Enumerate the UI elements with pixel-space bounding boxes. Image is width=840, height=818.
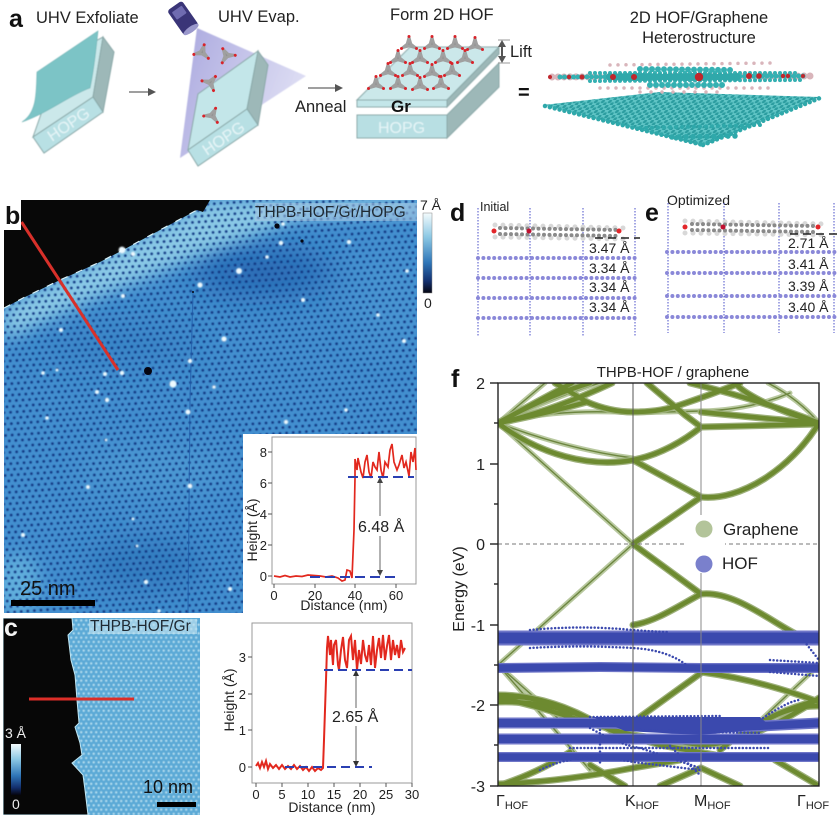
panel a: fabrication schematic [9,1,820,166]
label background [255,203,417,221]
label e: e [645,199,659,227]
graphene layers [478,258,638,318]
grid lines [668,203,834,333]
graphene bands [498,383,819,786]
legend: Graphene [723,520,799,539]
colour bar c: 0 [12,796,20,812]
HOF molecule side view [548,63,815,92]
molecules on surface [192,41,237,124]
bright adsorbates [21,222,409,613]
label a: a [9,5,24,33]
arrow: step 1 to 2 [129,88,156,96]
graphene layers [667,252,838,317]
step 3: layered block: HOPG [378,120,425,137]
legend: HOF [722,554,758,573]
step edge: black region [4,200,210,308]
x axis labels: HOF [636,800,659,812]
x axis labels [496,793,829,812]
distances: 3.40 Å [788,299,829,315]
inset: height profile b: Height (Å) [244,498,260,562]
chart c: height profile: 10 [301,787,315,802]
legend mask [685,515,725,573]
heading: UHV Evap.: UHV Evap. [218,8,300,26]
chart c: height profile: 30 [405,787,419,802]
step 1: exfoliated HOPG block: HOPG [45,105,93,145]
distances: 3.34 Å [589,260,630,276]
x axis labels: K [625,793,636,810]
label c: c [4,614,18,642]
caption: Initial: Initial [480,200,509,214]
chart c: height profile: Distance (nm) [288,799,376,815]
frame [498,383,819,786]
heading line 2: Heterostructure [642,29,756,47]
step 2: HOPG block [188,51,268,166]
distances: 3.47 Å [589,240,630,256]
step 1: exfoliated HOPG block [22,31,114,153]
label b: b [5,202,20,230]
ticks [268,452,396,588]
colour bar b [420,197,442,311]
y axis numbers: -3 [471,779,485,796]
label f: f [451,365,460,393]
distances: 3.39 Å [788,278,829,294]
distances: 3.34 Å [589,299,630,315]
label d: d [450,199,465,227]
arrow: lift [498,40,510,63]
y axis label: Energy (eV) [451,546,468,632]
K and M markers [633,383,701,786]
x axis labels: Γ [496,793,505,810]
panel c: STM image [3,618,200,815]
bands [498,383,819,786]
HOF bands [498,628,819,775]
legend [696,520,799,573]
chart c: height profile: Height (Å) [221,668,237,732]
step 2: evaporation cone [180,28,306,158]
inset: height profile b: 6.48 Å [358,517,405,536]
x axis labels: M [694,793,707,810]
inset: height profile b: 8 [260,445,267,460]
image title: THPB-HOF/Gr/HOPG [255,204,406,221]
dashed reference [595,237,640,239]
molecule [682,221,825,235]
distances: 2.71 Å [788,235,829,251]
heading: UHV Exfoliate: UHV Exfoliate [36,9,139,27]
heading: Form 2D HOF: Form 2D HOF [390,6,494,24]
fermi level [498,544,817,545]
profile line [29,698,134,700]
step edge: black region [3,618,88,815]
distances: 3.41 Å [788,256,829,272]
panel d: initial structure [450,199,640,337]
colour bar c: 3 Å [5,725,27,741]
y axis numbers: 0 [476,537,485,554]
label: Anneal: Anneal [295,98,346,116]
y axis numbers [471,376,485,796]
chart c: height profile: 2 [239,687,246,702]
graphene sheet [543,92,820,146]
caption: Optimized: Optimized [667,192,730,208]
inset: height profile b: 4 [260,507,267,522]
step 2: HOPG block: HOPG [200,119,248,159]
inset: height profile b: 60 [389,588,403,603]
inset: height profile b [243,434,417,613]
dashed reference [790,233,838,235]
colour bar c [5,725,27,812]
scale bar b [11,578,95,606]
distances [589,240,630,315]
distances: 3.34 Å [589,279,630,295]
grid lines [478,208,635,337]
profile line [22,222,118,370]
chart c: height profile: 0 [252,787,260,802]
scale bar c [143,777,196,807]
inset: height profile b: Distance (nm) [300,597,388,613]
scale bar b: 25 nm [20,578,76,600]
y axis numbers: -1 [471,618,485,635]
chart c: height profile: 1 [239,723,246,738]
HOF network [367,35,484,91]
inset: height profile b: 40 [348,588,362,603]
inset: height profile b: 0 [270,588,278,603]
faint domain line [188,292,193,613]
step 3: layered block [357,47,499,138]
inset: height profile b: 6 [260,476,267,491]
y axis numbers: -2 [471,698,485,715]
chart c: height profile: 2.65 Å [332,707,379,726]
label: Gr: Gr [391,97,411,116]
y axis numbers: 1 [476,457,485,474]
arrow: anneal [308,84,343,92]
chart c: height profile: 20 [353,787,367,802]
inset: height profile b: 2 [260,538,267,553]
equals sign: = [518,82,530,104]
icon: evaporator [167,1,200,37]
scale bar c: 10 nm [143,777,193,797]
chart title: THPB-HOF / graphene [597,364,749,381]
y axis numbers: 2 [476,376,485,393]
label: Lift: Lift [510,43,532,61]
y axis ticks [490,383,498,786]
panel e: optimized structure [645,192,838,333]
image title: THPB-HOF/Gr [90,618,191,635]
x axis labels: HOF [806,800,829,812]
x axis labels: Γ [797,793,806,810]
chart c: height profile [221,623,419,815]
chart c: height profile: 15 [327,787,341,802]
chart c: height profile: 5 [278,787,286,802]
panel f: band structure [451,364,829,812]
colour bar b: 7 Å [420,197,442,213]
chart c: height profile: 3 [239,650,246,665]
panel b: STM image [0,200,430,617]
x axis labels: HOF [505,800,528,812]
chart c: height profile: 25 [379,787,393,802]
molecule [492,225,625,239]
x axis labels: HOF [707,800,731,812]
distances [788,235,829,315]
heading: heterostructure: 2D HOF/Graphene [630,9,768,27]
inset: height profile b: 20 [308,588,322,603]
colour bar b: 0 [424,295,432,311]
inset: height profile b: 0 [260,569,267,584]
chart c: height profile: 0 [239,760,246,775]
